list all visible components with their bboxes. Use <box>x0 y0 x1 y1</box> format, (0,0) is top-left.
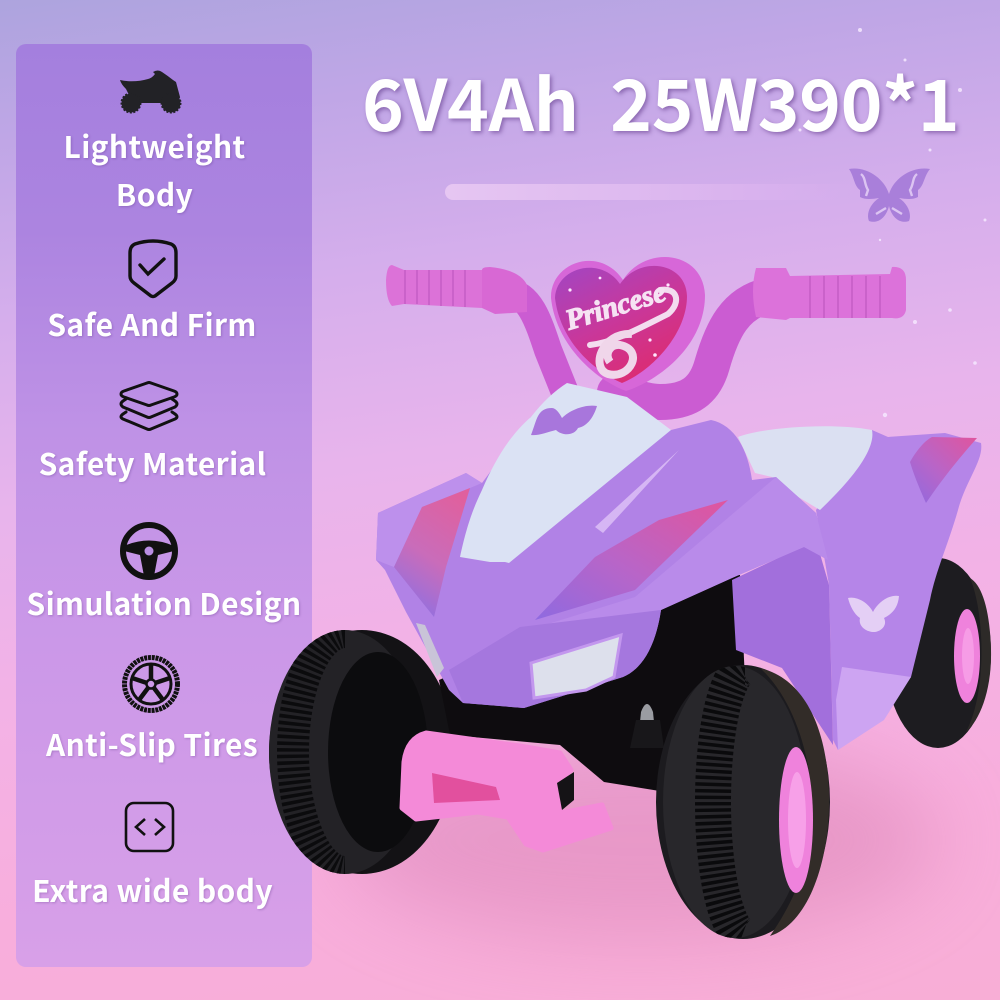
handlebar arms and stem <box>508 292 770 410</box>
heading: battery and motor specs: 6V4Ah 25W390*1 <box>362 50 959 152</box>
side lamp <box>416 623 444 677</box>
rear fender <box>816 430 981 750</box>
hood ridge highlight <box>595 450 679 533</box>
main body <box>376 417 828 708</box>
icon: butterfly <box>849 168 930 222</box>
chassis black <box>439 575 745 793</box>
text: Safety Material: Safety Material <box>39 440 266 484</box>
icon: shield check <box>128 239 178 298</box>
decorative bar <box>445 184 885 200</box>
text: Anti-Slip Tires: Anti-Slip Tires <box>46 721 258 765</box>
fork bolt <box>630 704 664 748</box>
hood <box>460 383 671 563</box>
icon: steering wheel <box>120 522 178 580</box>
grip ribs <box>405 270 880 318</box>
right front wheel <box>656 665 830 939</box>
hood butterfly <box>531 406 597 435</box>
text: Extra wide body: Extra wide body <box>32 867 273 911</box>
left grip <box>386 265 482 308</box>
ground shadow <box>340 740 940 940</box>
rear right wheel <box>885 558 991 748</box>
text: Lightweight Body: Body <box>116 171 193 215</box>
panel: features <box>16 44 312 967</box>
icon: tire <box>122 655 180 713</box>
badge text: Princese <box>561 276 670 337</box>
text: Safe And Firm: Safe And Firm <box>47 301 257 345</box>
icon: quad bike <box>120 70 182 114</box>
text: Simulation Design: Simulation Design <box>27 580 301 624</box>
icon: wide body arrows <box>124 802 174 852</box>
centre decal <box>535 500 728 620</box>
right grip <box>753 267 906 320</box>
inner fender <box>732 540 833 745</box>
illustration: purple quad bike <box>269 28 992 939</box>
heart badge <box>551 257 705 391</box>
text: Lightweight Body <box>64 123 246 215</box>
handlebar grips <box>386 265 906 320</box>
text: Lightweight Body: Lightweight <box>64 123 246 167</box>
side butterfly decal <box>848 596 899 632</box>
lower nose <box>449 610 661 708</box>
headlight <box>531 635 621 698</box>
seat <box>738 426 872 510</box>
icon: layers <box>120 381 178 431</box>
front bumper <box>402 733 611 850</box>
sparkles <box>798 28 986 417</box>
left decal <box>394 488 470 617</box>
left front wheel <box>269 630 455 874</box>
